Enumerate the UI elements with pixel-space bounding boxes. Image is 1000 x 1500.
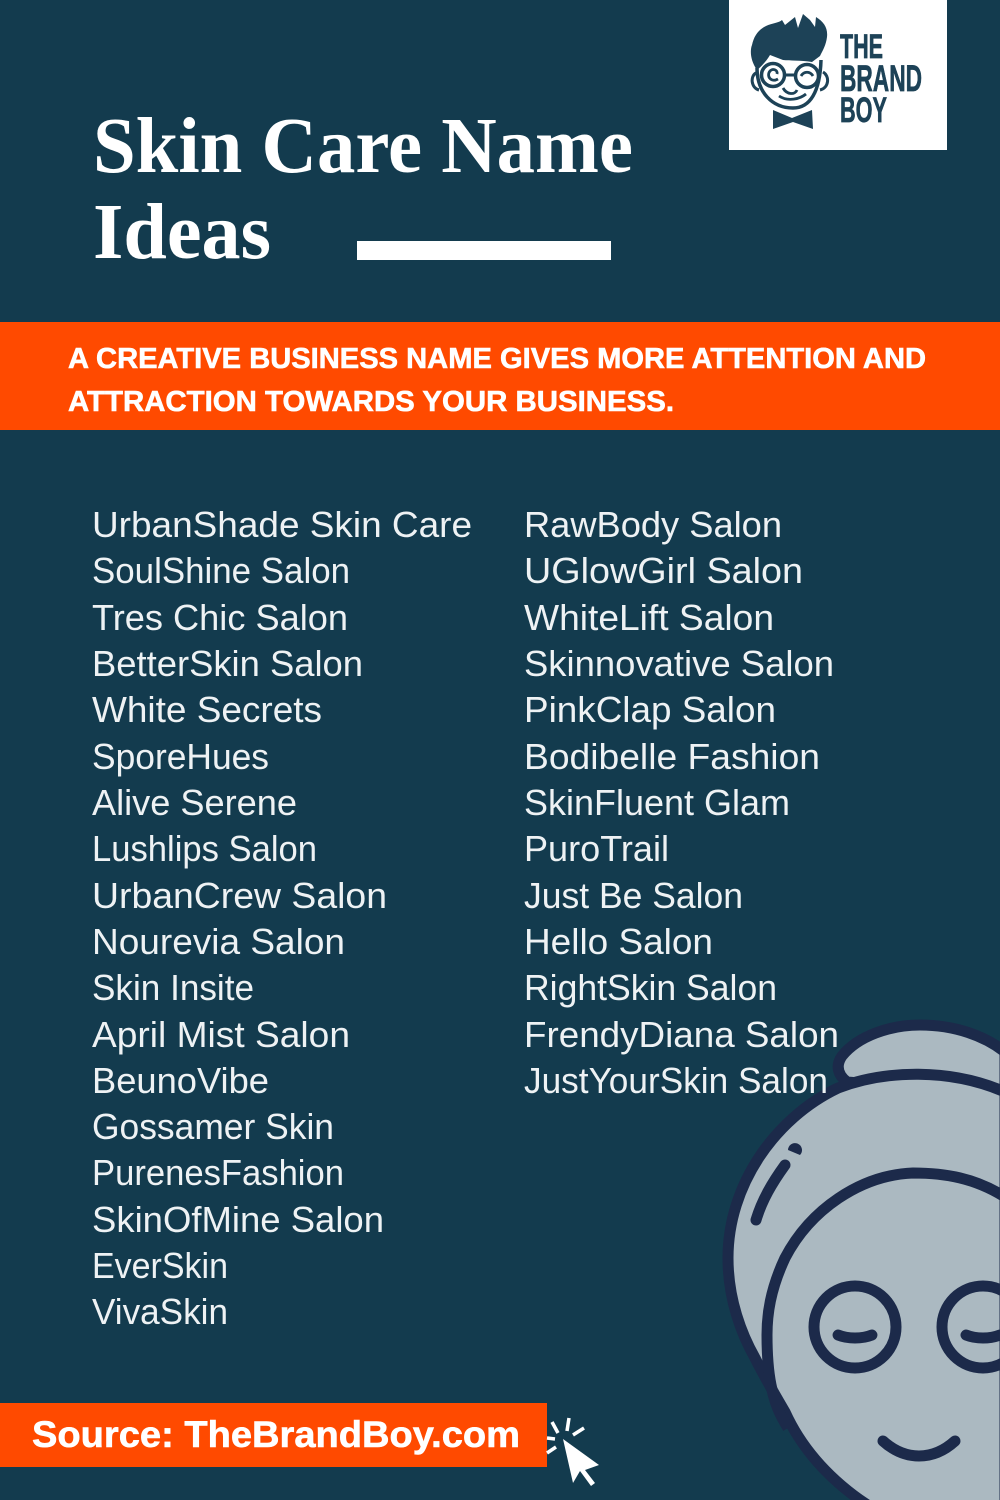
name list: right column: UGlowGirl Salon xyxy=(524,550,803,591)
name list: left column: UrbanCrew Salon xyxy=(92,875,387,916)
banner text xyxy=(68,343,926,418)
name list: left column: BetterSkin Salon xyxy=(92,643,363,684)
name list: left column xyxy=(92,504,472,1332)
name list: left column: White Secrets xyxy=(92,689,322,730)
illustration: face with mask xyxy=(728,1025,1000,1500)
mouth xyxy=(883,1441,955,1456)
name list: right column: PinkClap Salon xyxy=(524,689,776,730)
name list: right column: Hello Salon xyxy=(524,921,713,962)
logo wordmark: BOY xyxy=(840,91,887,130)
highlight xyxy=(756,1165,785,1220)
name list: left column: UrbanShade Skin Care xyxy=(92,504,472,545)
name list: left column: SkinOfMine Salon xyxy=(92,1199,384,1240)
title: Skin Care Name xyxy=(93,103,633,190)
name list: left column: Alive Serene xyxy=(92,782,297,823)
source bar xyxy=(0,1403,547,1467)
name list: right column xyxy=(524,504,839,1101)
hair bun xyxy=(838,1025,1000,1095)
logo icon: boy with glasses xyxy=(751,14,828,129)
orange banner xyxy=(0,322,1000,430)
highlight dot xyxy=(788,1143,802,1155)
right eye xyxy=(942,1286,1000,1368)
logo: The Brand Boy xyxy=(729,0,947,150)
name list: right column: JustYourSkin Salon xyxy=(524,1060,828,1101)
name list: right column: Skinnovative Salon xyxy=(524,643,834,684)
name list: left column: Nourevia Salon xyxy=(92,921,345,962)
name list: left column: April Mist Salon xyxy=(92,1014,350,1055)
name list: right column: Just Be Salon xyxy=(524,875,743,916)
name list: right column: RawBody Salon xyxy=(524,504,782,545)
name list: left column: SporeHues xyxy=(92,736,269,777)
logo wordmark: BRAND xyxy=(840,58,922,99)
name list: left column: Gossamer Skin xyxy=(92,1106,334,1147)
name list: right column: PuroTrail xyxy=(524,828,669,869)
source text: Source: TheBrandBoy.com xyxy=(32,1414,520,1455)
name list: left column: BeunoVibe xyxy=(92,1060,269,1101)
name list: left column: Tres Chic Salon xyxy=(92,597,348,638)
head xyxy=(728,1074,1000,1500)
name list: right column: WhiteLift Salon xyxy=(524,597,774,638)
name list: right column: Bodibelle Fashion xyxy=(524,736,820,777)
name list: left column: EverSkin xyxy=(92,1245,228,1286)
banner text: ATTRACTION TOWARDS YOUR BUSINESS. xyxy=(68,386,674,418)
title: Ideas xyxy=(93,189,271,276)
name list: left column: Skin Insite xyxy=(92,967,254,1008)
mask outline xyxy=(767,1173,1000,1428)
name list: right column: RightSkin Salon xyxy=(524,967,777,1008)
name list: right column: SkinFluent Glam xyxy=(524,782,790,823)
icon: cursor click xyxy=(547,1418,599,1486)
name list: right column: FrendyDiana Salon xyxy=(524,1014,839,1055)
name list: left column: Lushlips Salon xyxy=(92,828,317,869)
name list: left column: VivaSkin xyxy=(92,1291,228,1332)
name list: left column: PurenesFashion xyxy=(92,1152,344,1193)
name list: left column: SoulShine Salon xyxy=(92,550,350,591)
logo wordmark xyxy=(840,28,922,130)
logo wordmark: THE xyxy=(840,28,883,66)
title underline bar xyxy=(357,241,611,260)
left eye xyxy=(814,1286,896,1368)
title xyxy=(93,103,633,276)
banner text: A CREATIVE BUSINESS NAME GIVES MORE ATTENTION AND xyxy=(68,343,926,375)
